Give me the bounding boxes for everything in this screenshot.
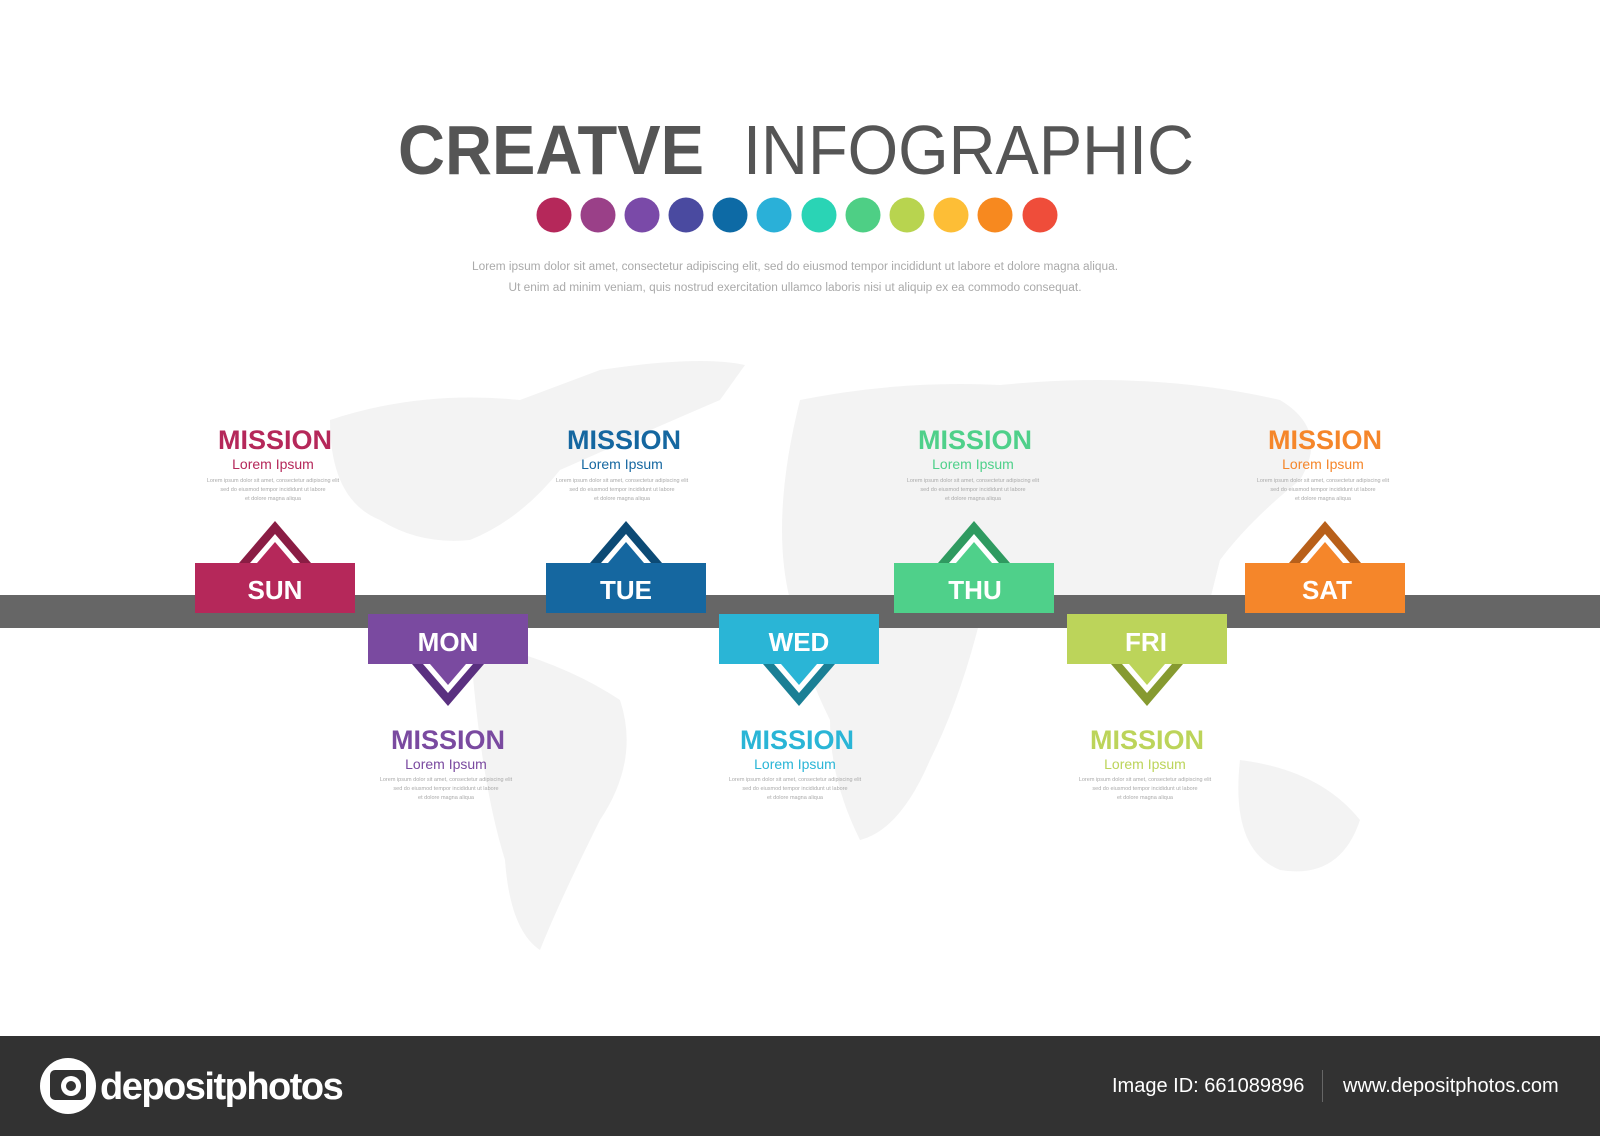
SAT step: MISSION xyxy=(1268,425,1382,455)
icon: camera logo xyxy=(40,1058,96,1114)
SAT step: sed do eiusmod tempor incididunt ut labore xyxy=(1270,487,1376,493)
TUE step: Lorem Ipsum xyxy=(581,456,663,472)
WED step: et dolore magna aliqua xyxy=(767,795,824,801)
THU step: Lorem ipsum dolor sit amet, consectetur adipiscing elit xyxy=(907,478,1040,484)
TUE step xyxy=(546,425,706,613)
TUE step: et dolore magna aliqua xyxy=(594,496,651,502)
intro text: Ut enim ad minim veniam, quis nostrud exercitation ullamco laboris nisi ut aliquip ex ea commodo consequat. xyxy=(508,282,1082,294)
THU step xyxy=(894,425,1054,613)
THU step: sed do eiusmod tempor incididunt ut labore xyxy=(920,487,1026,493)
TUE step: Lorem ipsum dolor sit amet, consectetur adipiscing elit xyxy=(556,478,689,484)
SAT step: et dolore magna aliqua xyxy=(1295,496,1352,502)
SUN step: Lorem Ipsum xyxy=(232,456,314,472)
footer: depositphotos xyxy=(100,1066,343,1108)
footer: Image ID: 661089896 xyxy=(1112,1075,1304,1097)
footer: www.depositphotos.com xyxy=(1342,1075,1559,1097)
FRI step: Lorem ipsum dolor sit amet, consectetur adipiscing elit xyxy=(1079,777,1212,783)
THU step: MISSION xyxy=(918,425,1032,455)
color dots xyxy=(536,198,1058,232)
SUN step: MISSION xyxy=(218,425,332,455)
timeline bar xyxy=(0,595,1600,628)
TUE step: sed do eiusmod tempor incididunt ut labore xyxy=(569,487,675,493)
SUN step: et dolore magna aliqua xyxy=(245,496,302,502)
SUN step xyxy=(195,425,355,613)
FRI step: et dolore magna aliqua xyxy=(1117,795,1174,801)
TUE step: TUE xyxy=(600,575,652,605)
SAT step xyxy=(1245,425,1405,613)
THU step: et dolore magna aliqua xyxy=(945,496,1002,502)
WED step xyxy=(719,614,879,801)
title: INFOGRAPHIC xyxy=(743,111,1194,189)
title: CREATVE xyxy=(398,111,704,189)
footer xyxy=(0,1036,1600,1136)
SAT step: SAT xyxy=(1302,575,1352,605)
MON step: sed do eiusmod tempor incididunt ut labore xyxy=(393,786,499,792)
MON step: Lorem ipsum dolor sit amet, consectetur adipiscing elit xyxy=(380,777,513,783)
TUE step: MISSION xyxy=(567,425,681,455)
MON step: et dolore magna aliqua xyxy=(418,795,475,801)
MON step xyxy=(368,614,528,801)
MON step: MON xyxy=(418,627,478,657)
THU step: Lorem Ipsum xyxy=(932,456,1014,472)
WED step: sed do eiusmod tempor incididunt ut labore xyxy=(742,786,848,792)
WED step: Lorem Ipsum xyxy=(754,756,836,772)
MON step: MISSION xyxy=(391,725,505,755)
WED step: WED xyxy=(769,627,829,657)
title xyxy=(398,111,1194,189)
FRI step: MISSION xyxy=(1090,725,1204,755)
WED step: MISSION xyxy=(740,725,854,755)
WED step: Lorem ipsum dolor sit amet, consectetur adipiscing elit xyxy=(729,777,862,783)
MON step: Lorem Ipsum xyxy=(405,756,487,772)
SAT step: Lorem Ipsum xyxy=(1282,456,1364,472)
SAT step: Lorem ipsum dolor sit amet, consectetur adipiscing elit xyxy=(1257,478,1390,484)
world map background xyxy=(330,361,1360,950)
THU step: THU xyxy=(948,575,1002,605)
intro text: Lorem ipsum dolor sit amet, consectetur adipiscing elit, sed do eiusmod tempor incididunt ut labore et dolore magna aliqua. xyxy=(472,261,1118,273)
FRI step xyxy=(1067,614,1227,801)
SUN step: SUN xyxy=(248,575,302,605)
FRI step: Lorem Ipsum xyxy=(1104,756,1186,772)
FRI step: FRI xyxy=(1125,627,1167,657)
SUN step: Lorem ipsum dolor sit amet, consectetur adipiscing elit xyxy=(207,478,340,484)
intro text xyxy=(472,261,1118,294)
SUN step: sed do eiusmod tempor incididunt ut labore xyxy=(220,487,326,493)
FRI step: sed do eiusmod tempor incididunt ut labore xyxy=(1092,786,1198,792)
